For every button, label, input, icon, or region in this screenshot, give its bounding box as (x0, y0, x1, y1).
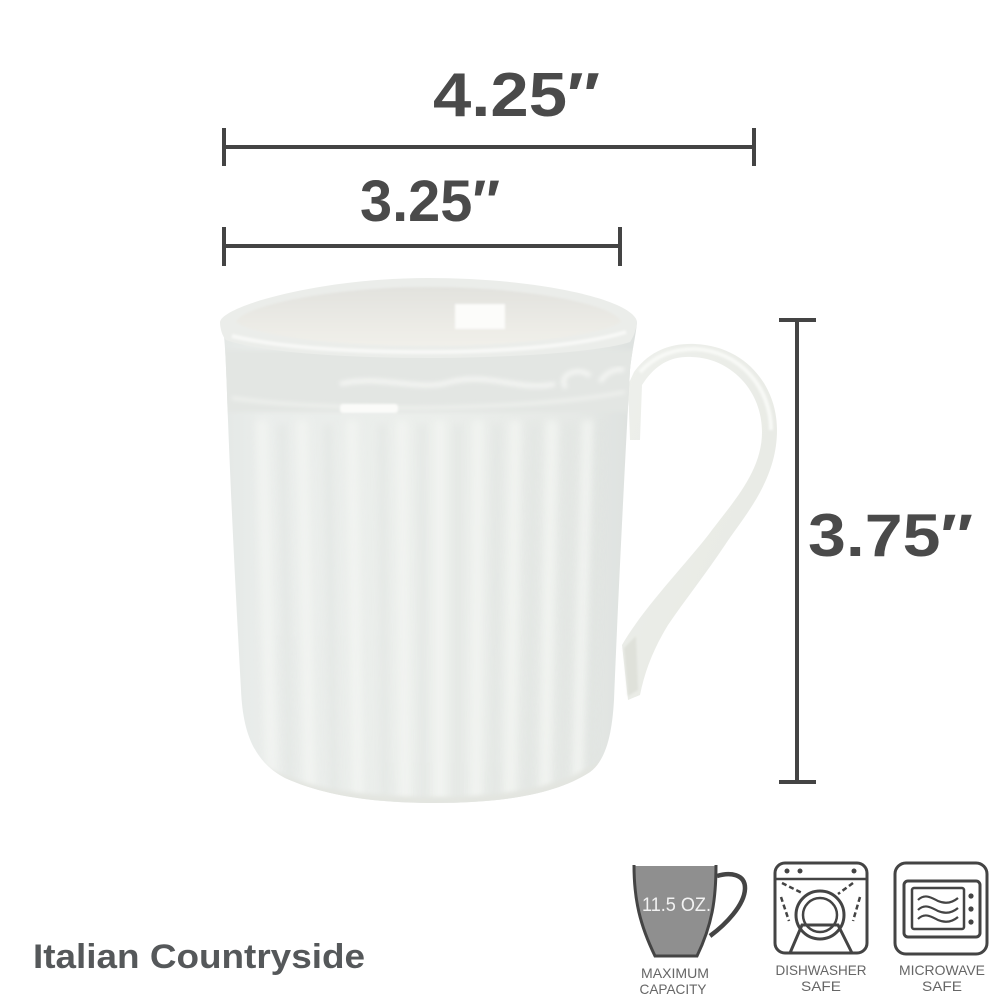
dimension: 3.25 inch diameter: 3.25″ (360, 169, 500, 234)
mug photo (220, 278, 777, 812)
icon: microwave safe: MICROWAVE (899, 962, 985, 978)
icon: maximum capacity mug: CAPACITY (640, 981, 707, 997)
icon: maximum capacity mug: 11.5 OZ. (642, 895, 711, 916)
mug body (222, 300, 637, 812)
icon: maximum capacity mug (634, 865, 745, 997)
icon: dishwasher safe: SAFE (801, 978, 841, 994)
dimension: 3.75 inch height (779, 320, 973, 782)
glaze highlight (340, 404, 398, 413)
dimension: 4.25 inch width: 4.25″ (433, 61, 600, 130)
icon: dishwasher safe: DISHWASHER (776, 962, 866, 978)
ribs (544, 422, 592, 782)
mug handle (622, 344, 777, 700)
dimension: 3.75 inch height: 3.75″ (808, 502, 973, 569)
icon: maximum capacity mug: MAXIMUM (641, 965, 709, 981)
dimension: 3.25 inch diameter (224, 169, 620, 266)
icon: microwave safe (895, 863, 987, 994)
base shading (278, 772, 586, 803)
icon: microwave safe: SAFE (922, 978, 962, 994)
icon: dishwasher safe (775, 863, 867, 994)
mug rim (220, 278, 637, 358)
ornamental band (222, 350, 637, 412)
interior highlight (455, 304, 505, 329)
collection name: Italian Countryside (33, 938, 365, 976)
dimension: 4.25 inch width (224, 61, 754, 166)
